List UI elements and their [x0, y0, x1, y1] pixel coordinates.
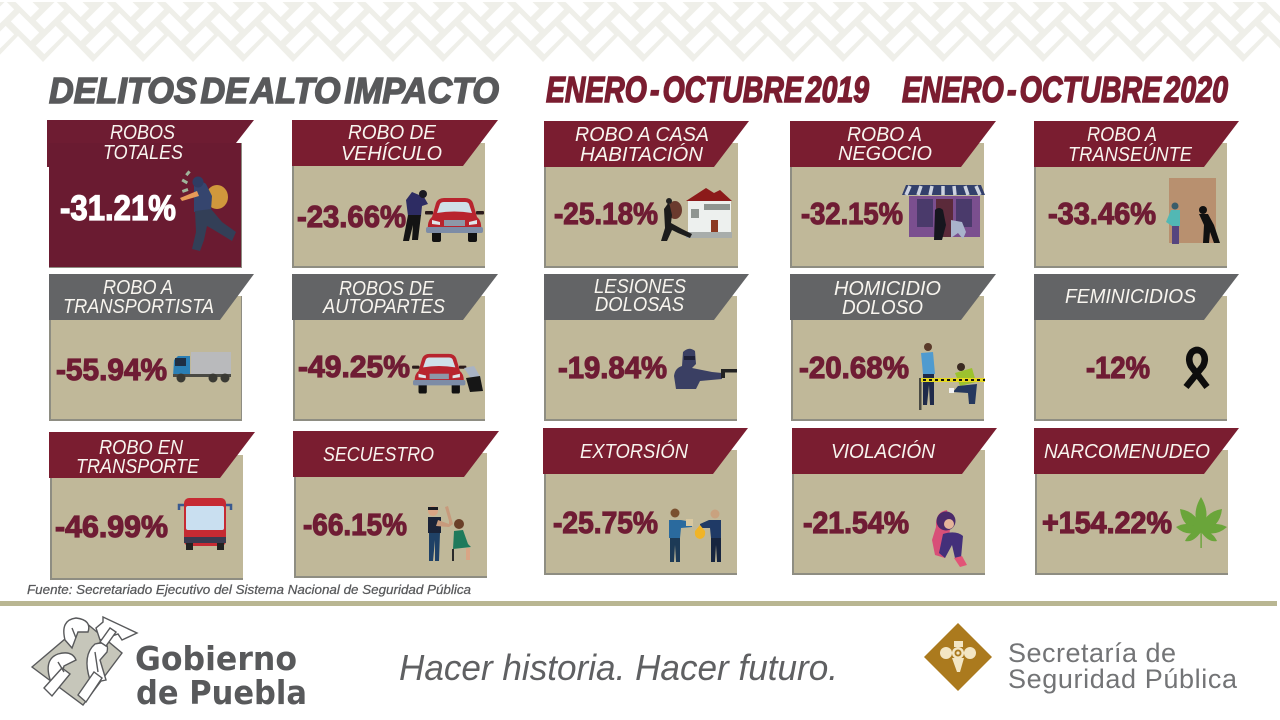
panel: robo a transeúnte: TRANSEÚNTE [1068, 143, 1192, 166]
title: delitos de alto impacto: DELITOS DE ALTO IMPACTO [49, 70, 499, 111]
panel: robo a transeúnte [1034, 121, 1239, 268]
panel: robos totales: -31.21% [60, 189, 176, 228]
panel: homicidio doloso: HOMICIDIO [834, 277, 941, 300]
panel: homicidio doloso: -20.68% [799, 350, 909, 385]
panel: robo de vehículo [292, 120, 498, 268]
panel: robo de vehículo: VEHÍCULO [341, 142, 442, 165]
panel: robo en transporte [49, 432, 255, 580]
icon: kidnapper and seated victim [428, 506, 471, 561]
panel: secuestro: -66.15% [303, 507, 407, 542]
panel: extorsión [543, 428, 748, 575]
panel: homicidio doloso: DOLOSO [842, 296, 923, 319]
panel: violación: -21.54% [803, 505, 909, 540]
icon: truck [173, 352, 231, 382]
source note: Fuente: Secretariado Ejecutivo del Sistema Nacional de Seguridad Pública [27, 583, 471, 597]
slogan: Hacer historia. Hacer futuro. [399, 647, 838, 688]
panel: robos de autopartes: ROBOS DE [339, 277, 434, 300]
text: Secretaría de Seguridad Pública: Seguridad Pública [1008, 664, 1238, 694]
icon: runner and house [661, 188, 732, 241]
logo: SSP diamond emblem [924, 623, 992, 691]
panel: feminicidios [1034, 274, 1239, 421]
panel: robo de vehículo: ROBO DE [348, 121, 436, 144]
panel: lesiones dolosas: DOLOSAS [595, 293, 684, 316]
icon: crime scene [919, 343, 985, 410]
panel: lesiones dolosas: -19.84% [558, 350, 667, 385]
panel: robo a negocio: -32.15% [801, 196, 903, 231]
panel: secuestro [293, 431, 499, 578]
icon: black ribbon [1186, 350, 1207, 387]
heading: period 2019: ENERO - OCTUBRE 2019 [546, 69, 869, 110]
panel: robos de autopartes [292, 274, 498, 421]
panel: robo a negocio: NEGOCIO [838, 142, 932, 165]
panel: robo a casa habitación: ROBO A CASA [575, 123, 709, 146]
panel: robos totales: ROBOS [110, 121, 175, 144]
panel: robo a negocio: ROBO A [847, 123, 922, 146]
text: Gobierno de Puebla: de Puebla [136, 673, 307, 712]
panel: narcomenudeo [1034, 428, 1239, 575]
panel: robo a casa habitación: HABITACIÓN [580, 143, 703, 166]
panel: violación: VIOLACIÓN [831, 440, 935, 463]
panel: robo a negocio [790, 121, 996, 268]
text: Secretaría de Seguridad Pública: Secretaría de [1008, 638, 1176, 668]
panel: robo a transportista: TRANSPORTISTA [63, 295, 214, 318]
icon: cannabis leaf [1176, 497, 1227, 548]
panel: lesiones dolosas: LESIONES [594, 275, 686, 298]
panel: robo a transportista [49, 274, 254, 421]
panel: narcomenudeo: +154.22% [1042, 505, 1172, 540]
panel: extorsión: -25.75% [553, 505, 658, 540]
panel: secuestro: SECUESTRO [323, 443, 434, 466]
icon: red bus [179, 498, 231, 550]
panel: robo en transporte: ROBO EN [99, 436, 183, 459]
panel: robos de autopartes: -49.25% [298, 349, 410, 384]
text: Gobierno de Puebla: Gobierno [135, 639, 297, 678]
panel: robo a casa habitación: -25.18% [554, 196, 658, 231]
icon: car with removed parts [412, 354, 483, 394]
panel: homicidio doloso [790, 274, 996, 421]
panel: robo a transeúnte: -33.46% [1048, 196, 1156, 231]
panel: robos totales: TOTALES [103, 141, 183, 164]
icon: gunman [674, 349, 737, 389]
text: Gobierno de Puebla [135, 639, 307, 712]
panel: robos de autopartes: AUTOPARTES [321, 295, 445, 318]
panel: robo a transportista: -55.94% [56, 352, 167, 387]
panel: robo en transporte: -46.99% [55, 509, 168, 544]
panel: narcomenudeo: NARCOMENUDEO [1044, 440, 1210, 463]
panel: lesiones dolosas [544, 274, 749, 421]
panel: extorsión: EXTORSIÓN [580, 440, 688, 463]
panel: robo en transporte: TRANSPORTE [76, 455, 199, 478]
icon: man breaking into car [403, 190, 484, 242]
panel: robo a casa habitación [544, 121, 749, 268]
icon: thief with money bag [180, 170, 236, 251]
logo: Gobierno de Puebla emblem [32, 617, 137, 705]
text: Secretaría de Seguridad Pública [1008, 638, 1238, 694]
icon: extortion payment [669, 508, 721, 562]
icon: crouching woman [932, 510, 967, 567]
panel: robo de vehículo: -23.66% [297, 199, 406, 234]
panel: robo a transportista: ROBO A [103, 276, 173, 299]
panel: robos totales [47, 120, 254, 268]
panel: robo a transeúnte: ROBO A [1087, 123, 1157, 146]
panel: feminicidios: -12% [1086, 350, 1150, 385]
icon: pedestrian and thief at wall [1166, 178, 1220, 244]
panel: feminicidios: FEMINICIDIOS [1065, 285, 1196, 308]
icon: shop robbery [902, 185, 985, 240]
panel: violación [792, 428, 997, 575]
